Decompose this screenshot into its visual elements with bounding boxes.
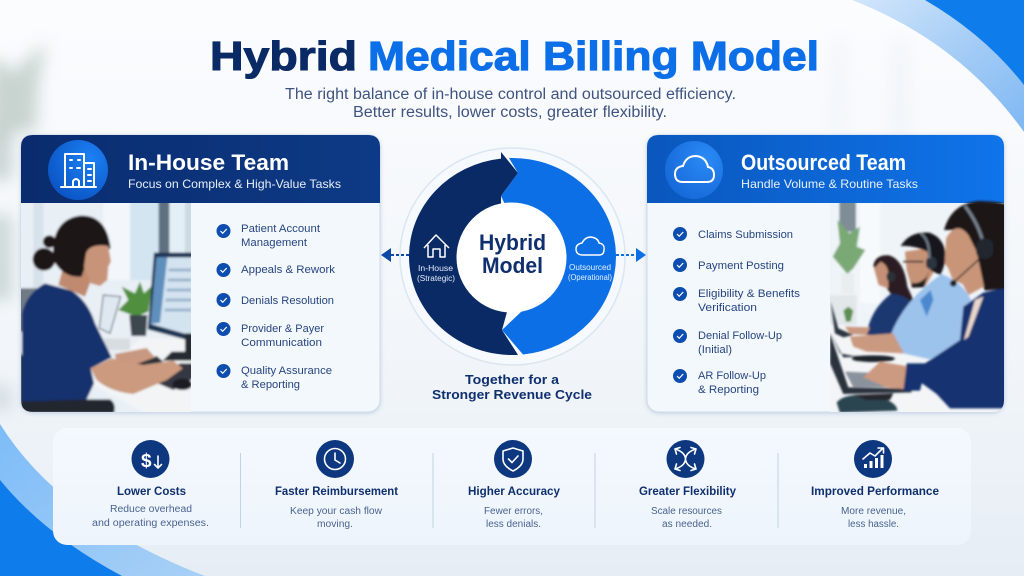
benefit: higher accuracy: Higher Accuracy (468, 486, 561, 498)
benefit: lower costs: Lower Costs (117, 486, 186, 498)
benefit: greater flexibility (639, 440, 737, 530)
front woman: hair (944, 201, 1008, 291)
title: Hybrid (210, 33, 357, 79)
item: payment posting (673, 258, 784, 272)
diagram: hybrid model cycle (400, 148, 625, 365)
benefit: improved performance: More revenue, (841, 506, 906, 517)
front woman: body (918, 287, 1008, 408)
front woman: hands (863, 362, 923, 391)
benefit: faster reimbursement (275, 440, 398, 530)
benefit: faster reimbursement: Keep your cash flow (290, 506, 383, 517)
benefit: improved performance: Improved Performance (811, 486, 939, 498)
center label: Hybrid (479, 230, 546, 255)
desk (94, 339, 191, 412)
bun (33, 248, 55, 271)
benefit: lower costs: $ (141, 451, 152, 472)
benefit: lower costs: Reduce overhead (110, 504, 192, 515)
caption: together: Together for a (465, 372, 560, 387)
center label (479, 230, 546, 278)
benefit: greater flexibility: Scale resources (651, 506, 722, 517)
item: provider and payer communication (216, 322, 324, 349)
panel: outsourced team (647, 135, 1008, 417)
caption: together (432, 372, 592, 402)
face (84, 245, 111, 286)
arrow: to outsourced (616, 248, 646, 262)
item: patient account management (216, 223, 320, 249)
benefit: greater flexibility: as needed. (662, 519, 712, 530)
mouse (837, 395, 897, 413)
keyboard and mouse (158, 362, 191, 391)
subheading: outsourced: Handle Volume & Routine Tasks (741, 177, 918, 191)
label: in-house strategic (417, 264, 455, 283)
front laptop (830, 333, 912, 394)
benefit: higher accuracy: Fewer errors, (484, 506, 543, 517)
item: claims submission: Claims Submission (698, 229, 793, 241)
photo: outsourced team with headsets (827, 198, 1008, 417)
segment: outsourced (501, 158, 616, 354)
benefit: higher accuracy (468, 440, 561, 530)
item: payment posting: Payment Posting (698, 260, 784, 272)
item: eligibility and benefits verification: Verification (698, 302, 757, 314)
item: ar follow-up and reporting: & Reporting (698, 384, 759, 396)
item: ar follow-up and reporting (673, 369, 766, 396)
monitor (148, 253, 193, 342)
item: denial follow-up (673, 329, 782, 356)
icon: house (424, 235, 449, 257)
background plant (833, 220, 865, 274)
icon: cloud (665, 141, 723, 199)
item: quality assurance and reporting: & Reporting (241, 379, 300, 391)
benefit: improved performance (811, 440, 939, 530)
center circle (456, 202, 566, 312)
panel: in-house team (17, 135, 380, 417)
item: patient account management: Patient Account (241, 223, 320, 235)
far woman (873, 255, 917, 308)
panel header: outsourced (647, 135, 1004, 203)
benefit: faster reimbursement: Faster Reimbursement (275, 486, 398, 498)
list: in-house tasks (216, 223, 336, 391)
item: eligibility and benefits verification: Eligibility & Benefits (698, 288, 801, 300)
item: denial follow-up: (Initial) (698, 344, 732, 356)
plant (118, 282, 152, 317)
subtitle: Better results, lower costs, greater flexibility. (353, 104, 667, 121)
photo: in-house worker at desk (17, 200, 193, 417)
item: claims submission (673, 227, 793, 241)
title (210, 33, 819, 79)
item: patient account management: Management (241, 237, 307, 249)
item: quality assurance and reporting: Quality Assurance (241, 365, 332, 377)
subtitle: The right balance of in-house control and outsourced efficiency. (285, 86, 736, 103)
subheading: in-house: Focus on Complex & High-Value Tasks (128, 177, 341, 191)
heading: outsourced team: Outsourced Team (741, 150, 906, 175)
item: quality assurance and reporting (216, 364, 332, 391)
center label: Model (482, 253, 543, 278)
hair (53, 216, 111, 277)
benefit: faster reimbursement: moving. (317, 519, 353, 530)
item: appeals and rework: Appeals & Rework (241, 264, 336, 276)
torso (22, 283, 112, 402)
benefit: improved performance: less hassle. (848, 519, 899, 530)
arrow: to in-house (381, 248, 409, 262)
item: denials resolution (216, 293, 334, 307)
middle man: shirt (890, 274, 972, 359)
chair (20, 352, 115, 413)
item: provider and payer communication: Provider & Payer (241, 323, 324, 335)
segment: in-house (409, 152, 518, 355)
benefit: lower costs (92, 440, 209, 529)
benefit: lower costs: and operating expenses. (92, 518, 209, 529)
icon: small cloud (576, 237, 604, 255)
panel header: in-house (21, 135, 380, 203)
item: provider and payer communication: Communication (241, 337, 322, 349)
label: outsourced operational: (Operational) (568, 273, 612, 282)
benefit: higher accuracy: less denials. (486, 519, 541, 530)
benefit: greater flexibility: Greater Flexibility (639, 486, 737, 498)
label: in-house strategic: (Strategic) (417, 274, 455, 283)
heading: in-house team: In-House Team (128, 150, 289, 175)
middle man: head (905, 248, 934, 287)
subtitle (285, 86, 736, 121)
label: outsourced operational (568, 263, 612, 282)
item: appeals and rework (216, 263, 336, 277)
icon: hospital building (48, 140, 108, 200)
front woman: face (945, 228, 984, 295)
item: denials resolution: Denials Resolution (241, 295, 334, 307)
neck (58, 267, 92, 297)
desk (827, 323, 1008, 417)
far arm (115, 348, 155, 365)
label: in-house strategic: In-House (418, 264, 454, 273)
benefits bar (53, 428, 971, 545)
item: ar follow-up and reporting: AR Follow-Up (698, 370, 766, 382)
list: outsourced tasks (673, 227, 801, 396)
item: denial follow-up: Denial Follow-Up (698, 330, 782, 342)
caption: together: Stronger Revenue Cycle (432, 387, 592, 402)
near arm (91, 358, 183, 394)
label: outsourced operational: Outsourced (569, 263, 611, 272)
item: eligibility and benefits verification (673, 287, 801, 314)
title: Medical Billing Model (368, 33, 819, 79)
